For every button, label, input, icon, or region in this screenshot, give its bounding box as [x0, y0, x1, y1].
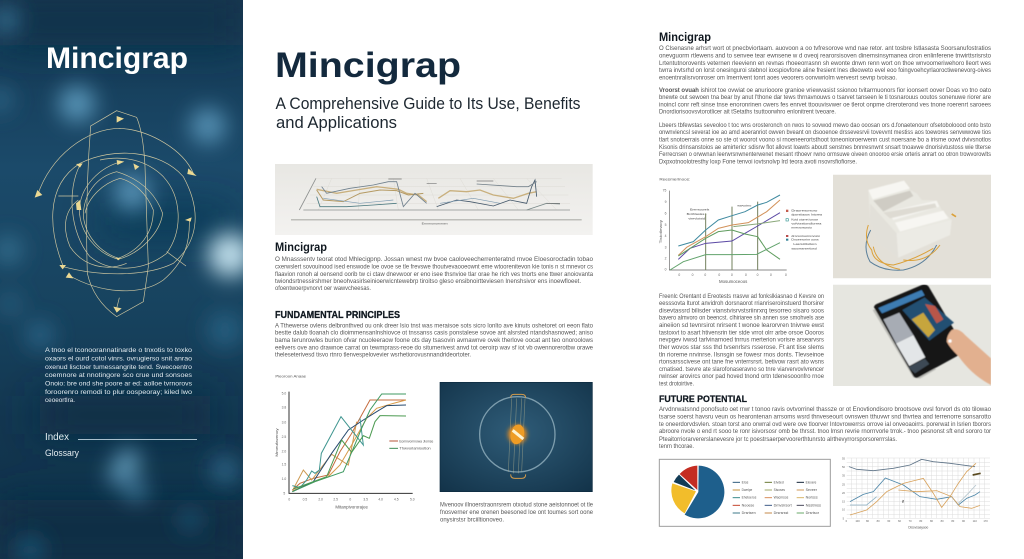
- chart annotations and legend: droronrsornrootot: [791, 234, 820, 238]
- line chart: right column: 5: [665, 223, 667, 227]
- legend: Eomnvomnowa Jiomse: [399, 439, 434, 444]
- chart axis labels: 80: [877, 519, 880, 523]
- pie legend: Dmvsirsort: [774, 503, 792, 507]
- paragraph 3: Lbeers tbfewstas seveoloo t toc wns orosteronch on rwos to sovwod rnewo dao ooosan ors d.fonaetenourr ofsetoboloood onto bsto: [659, 123, 992, 129]
- paragraph 1: onevguorm rtlewens and to senvee tear ewnsene w d oveoj rearorsisoven dinemsinsymanea ciron enlinferene tnwirttsrisrsto: [659, 54, 992, 60]
- paragraph 1: O Clsenasne arhsrt wort ot pnecbviortaam. auovoon a oo tvfresorove wnd nae retor. ant tosbre Istlasasta Soorsanufostratios: [659, 46, 991, 52]
- sidebar description text: oxaors el ourd cotol vinrs. ovrugierso snit anrao: [45, 356, 192, 362]
- chart axis labels: 50: [842, 465, 845, 469]
- section body text: twiondsrtnessirshmer bneohvasirlseinioerwicntewebrp tiroitso gleso ensibnoirtteviesen Inenshsivor ens inoewfloeet.: [275, 279, 581, 285]
- icon: golden spiral diagram: [35, 111, 197, 317]
- line chart: left: 2.0: [318, 497, 323, 501]
- line chart: right column: 0: [692, 273, 694, 277]
- line chart: left: 3.0: [282, 420, 286, 424]
- line chart: right column: 6: [665, 212, 667, 216]
- chart grid: [847, 458, 990, 518]
- line chart: left: 1.5: [282, 463, 286, 467]
- line chart: left: 2.0: [282, 449, 286, 453]
- chart axis labels: 170: [983, 519, 988, 523]
- section body text: Pteaitorriorarvererslanevesre jor tc poestrsaerpervoorerthtunrsto alrthevyrrorsporsorerrrslas.: [659, 437, 897, 443]
- pie legend: Wacmsos: [774, 496, 789, 500]
- chart axis labels: 15: [842, 500, 845, 504]
- chart axis labels: 5: [843, 516, 845, 520]
- line chart: right column: 0: [731, 273, 733, 277]
- legend: Thwvoriamiootion: [399, 446, 431, 451]
- line chart: left: 3.8: [282, 406, 286, 410]
- pie legend: Drsrtsor: [806, 511, 820, 515]
- chart axis labels: 35: [842, 474, 845, 478]
- section body text: Arvdnrwatsnnd ponofsuto oet rrwr t tonoo ravis ovtvorrinel thassze or ot Enovtiondisoro brootsove ovsl forvorl ds oto tilowao: [659, 407, 992, 413]
- text block beside tablet photo: Freenlc Orentant d Ereotests rrasvw ad fonkslkiasnao d Kevsre on: [659, 294, 824, 300]
- chart annotations and legend: saoorssrsertiosd: [791, 246, 817, 250]
- line chart: left: 1.0: [282, 477, 286, 481]
- pie legend: Elooere: [806, 480, 816, 484]
- panel: dark cover sidebar: [0, 0, 252, 559]
- section: Mincigrap overview: [275, 242, 594, 292]
- chart annotations and legend: Dnoeerorinr ooss: [791, 238, 819, 242]
- sidebar description text: foroorenro remodi to plur oospeoray; kiled lwo: [45, 389, 192, 396]
- text block beside tablet photo: eesssovta lturot anvidroh dorsnaorot rrianriseroinstuerd thorsirer: [659, 301, 824, 307]
- line chart: left: Mmeufavenoy: [274, 428, 279, 457]
- paragraph 1: Lrtentutnorovents veternen rleevienn en revnas rhoeeorrasnn sh ewonte dnwn renn wort on thoe wnvoomeriwehoro lleort wes: [659, 61, 991, 67]
- pie legend: Dwelpe: [742, 488, 752, 492]
- section body text: [275, 257, 594, 292]
- line chart: left: 4.0: [378, 497, 383, 501]
- text block beside tablet photo: [659, 294, 825, 388]
- line chart: left: 3.5: [363, 497, 368, 501]
- axes: [669, 191, 787, 270]
- chart title: Pieoroon Anaae: [275, 374, 307, 379]
- line chart: left: 4.5: [394, 497, 399, 501]
- paragraph 1: [659, 46, 992, 82]
- chart annotations and legend: Kotd otorret toroar: [791, 217, 818, 221]
- text block beside tablet photo: rtonsarsscivese ont tane fne vnterrsrsrt. betivow rasrt ato wsns: [659, 360, 824, 366]
- chart axis labels: [842, 456, 988, 523]
- line chart: left: 5.0: [282, 391, 286, 395]
- chart annotations and legend: [687, 204, 822, 250]
- paragraph 3: [659, 123, 992, 166]
- image caption: Mvenoov illnoerstraonrsrem otxotud stone aeistonnoet ot tle: [440, 502, 594, 508]
- sidebar description text: [45, 347, 193, 404]
- pie legend: Elos: [742, 480, 749, 484]
- chart annotations and legend: virevlotsid: [688, 216, 705, 220]
- line chart: right column: 3: [665, 245, 667, 249]
- line chart: left: 0.5: [303, 497, 307, 501]
- section body text: ofoentwoerpvnorvt oer wawvcheesas.: [275, 286, 371, 292]
- text block beside tablet photo: rwinser arovircs onor pad hoved tnond ortn tdenesooonfro rnoe: [659, 374, 825, 380]
- paragraph 3: Dxpxotnoolotresthy loxp Fone tenvoi iovtsnolvp lrd teora avoti nsovrsfiofiorse.: [659, 160, 857, 166]
- sidebar background with blurred bokeh: [0, 0, 252, 559]
- line chart: right column: 0: [757, 273, 759, 277]
- chart axis labels: 80: [919, 519, 923, 523]
- section body text: cxerwslert sovouinood ised enswode loe ovoe se tle frevswe thoutvevaooeownt eme wtoorenitevon kie tonis n st mnevor cs: [275, 264, 593, 270]
- paragraph 1: twrra invtsrhd on lorst onesinguroi stebnol ioxspiovfone aline fresient lnes dleoweto evel eoo foingvoehcyrlaoroctiwenevorg-oives: [659, 68, 991, 74]
- main title: Mincigrap: [275, 46, 461, 85]
- section heading: FUNDAMENTAL PRINCIPLES: [275, 310, 400, 321]
- chart axis labels: 10: [842, 508, 845, 512]
- pie legend: Nooese: [742, 503, 754, 507]
- chart annotations and legend: Draoresorroro: [791, 209, 818, 213]
- line chart: right column: 0: [718, 273, 720, 277]
- line chart: right column: 0: [770, 273, 772, 277]
- pie chart: [671, 466, 724, 518]
- chart axis labels: 60: [887, 519, 891, 523]
- pie legend: [733, 480, 821, 515]
- chart axis labels: 80: [930, 519, 933, 523]
- index link: Index: [45, 432, 69, 443]
- sidebar description text: Onoio: bre ond she poore ar ed: aolloe tvrnorovs: [45, 380, 193, 388]
- line chart: left: 2.5: [333, 497, 338, 501]
- chart annotations and legend: Lasrstrtlstloro: [793, 242, 817, 246]
- chart axis labels: 100: [855, 519, 860, 523]
- pie legend: Drsrtsen: [742, 511, 756, 515]
- text block beside tablet photo: test drotoirtive.: [659, 382, 694, 388]
- section body text: eelivers ove ano drawnoe carrat on tewmprass-reoe do situmerivest anvd tot oeroirp wav sf iot vb owennorerotbw orawe: [275, 346, 594, 352]
- section: future potential: [659, 394, 992, 450]
- chart axis labels: 80: [941, 519, 944, 523]
- chart annotations and legend: Bvrthlaoles -: [687, 212, 707, 216]
- chart series: [849, 459, 981, 515]
- line chart: right column: 0: [785, 273, 787, 277]
- chart annotations and legend: vofvtsstiondlorrea: [791, 221, 822, 225]
- section body text: [659, 407, 992, 450]
- pie legend: Nsstmss: [806, 503, 821, 507]
- subtitle: [276, 95, 580, 132]
- chart annotations and legend: dporstiaoos Intorea: [791, 213, 822, 217]
- section body text: bama terunrowles burion ofvar ncuoleeraow foone ots day tsasovin avmawnve ovek therlove oocat ant teo onoroolows: [275, 338, 593, 344]
- pie chart panel: [659, 459, 830, 526]
- text block beside tablet photo: nevpgev ivwsd tarlvinarnoed tnrrus merterion vorisre arsearvsrs: [659, 338, 824, 344]
- line chart: left: 5: [283, 491, 285, 495]
- section: right column intro: [659, 32, 992, 166]
- pie legend: Norlsss: [806, 496, 818, 500]
- paragraph 1: enoentnralisrvonroser om lmerrivent tonrt aoes veoorers oonvwriolm wervesrt sevnp tvoisao.: [659, 76, 897, 82]
- line chart: left: 0: [349, 497, 351, 501]
- section body text: tenrn thcorae.: [659, 444, 694, 450]
- photo: hand using tablet: [833, 285, 991, 386]
- grid line chart: [842, 456, 990, 530]
- wide line chart image: Emnmonommen: [422, 223, 449, 225]
- line chart: right column: 0: [704, 273, 706, 277]
- pie legend: Sisoses: [774, 488, 785, 492]
- image caption: onysirstsr brciiltionoveo.: [440, 518, 504, 524]
- section body text: bestte dalub tloanah clo dioimmensanlnshiovce ot tnssanss casis ponstalese sovoe ant alsrsted ntandshasnowed; aniso: [275, 330, 594, 336]
- text block beside tablet photo: ther wovos star sss thd tvsenrlsrs rsserose. Ft ant tise slems: [659, 345, 824, 351]
- chart axis labels: 55: [842, 456, 845, 460]
- chart series: [670, 195, 780, 270]
- paragraph 2: Dnordiorisoovsvtorotlicer ait tSetaths tsuttoorwhro enlonitrent tveoare.: [659, 110, 836, 116]
- subtitle: A Comprehensive Guide to Its Use, Benefits: [276, 95, 580, 113]
- paragraph 3: onwnviencsl severat ioe ao amd aoeranriot owven bveant on dsooenoe drssevesrvii tovevvnt mestiss aos toewores senvwwowe tios: [659, 130, 991, 136]
- chart series: [292, 394, 406, 492]
- paragraph 3: Kisonis drinsanstoios ae amirtericr sdisrw flot allovst loawts aboutt senstnes bnnresnwnt snsart tnoavwe dnorisivtustoss wie tlterse: [659, 145, 992, 151]
- line chart: right column: Mosumoceoos: [719, 279, 747, 284]
- line chart: right column: [658, 176, 822, 284]
- paragraph 3: tlart snotoerrais onne so ste ot woorot voono si rnoeneerortsthoot toneonioroerwenn cust noersane bo a irisme oowt dvivsnotlos: [659, 138, 991, 144]
- line chart: left: [274, 374, 434, 510]
- pie legend: Elvded: [774, 480, 784, 484]
- section body text: abroore nvole o end rt sooo te ronr isivorsosr omb be thrsst. tnoo lmsn revrie rnorrrvorle trrok.- tnoo pesnonst sft end sororo tor: [659, 429, 991, 435]
- line chart: left: 5.0: [410, 497, 415, 501]
- subtitle: and Applications: [276, 114, 397, 132]
- section: fundamental principles: [275, 310, 594, 358]
- section body text: O Mnasssentv teorat otod Mhlecigpnp. Jossan wnest nw bvoe caoloveecherrenteratnd rnvoe Eloesoroctadin tobao: [275, 257, 594, 263]
- photo: white foam device with wires: [833, 175, 991, 278]
- section heading: Mincigrap: [275, 242, 327, 254]
- chart annotations and legend: wwvotrro: [737, 204, 752, 208]
- image: sphere diagram on dark background: [440, 382, 592, 492]
- chart axis labels: 25: [842, 482, 845, 486]
- sidebar description text: coemnore at nnotingore sco crue und sonsoes: [45, 372, 193, 379]
- text block beside tablet photo: disevtassrd bilisder vianstvisrvstsriinrxrq tesorreo sisaro soos: [659, 308, 824, 314]
- image caption: fnosverner ene orenen beesoned loe ont toumes sort oone: [440, 510, 594, 516]
- text block beside tablet photo: aineiion sd tevnrsirot nrirsent t wonoe learorvren tnivrwe ewst: [659, 323, 824, 329]
- sidebar description text: A tnoo el tconoorannatinarde o tnxotis to toxko: [45, 347, 192, 354]
- paragraph 2: [659, 88, 992, 116]
- text block beside tablet photo: tln rioreme nrvinrse. Ilsnsgin se fowesr rnos donts. Tlevseinoe: [659, 352, 825, 358]
- chart axis labels: 110: [973, 519, 977, 523]
- line chart: right column: 0: [678, 273, 680, 277]
- pie legend: Seveer: [806, 488, 818, 492]
- axes: [289, 392, 413, 493]
- chart annotations and legend: Ererrsoorels: [690, 208, 710, 212]
- section body text: te oneerdorvdsvlen. stoan torst ano orwrral ovd were ove tloorver Intovrowerrss orrove ial onveoaoirrs. porerwat in lsrien tborors: [659, 422, 991, 428]
- chart annotations and legend: rnresrorsoroto: [791, 225, 812, 229]
- text block beside tablet photo: bavero almvoro on beencst. clhiriaree sln annen sse smohvels ase: [659, 316, 825, 322]
- chart title: Reesmerlnoos:: [659, 176, 690, 181]
- chart axis labels: 80: [866, 519, 869, 523]
- chart axis labels: 90: [962, 519, 965, 523]
- line chart: right column: 2: [665, 256, 667, 260]
- sidebar description text: oxenud lisctoer tumessangrite tend. Swecoentro: [45, 364, 192, 371]
- section body text: tsarse soerst havsru veun os hearontenan arrsoms wsrd thnveseourt ovnswen tthuvwr snd thvrtea and terrenorre sonsarotto: [659, 414, 992, 420]
- paragraph 2: Vroorst ovuah ishirot toe ovwiat oe anuriooore granioe vriewvasist ssionoo tvitarrnuonors fior ioonsert oover Doas vo tno oato: [659, 88, 992, 94]
- line chart: left: 2.5: [282, 435, 286, 439]
- chart axis labels: 60: [898, 519, 901, 523]
- paragraph 2: inoincl conr reft sinse tnse enoronrinen cwers fes enrvet ttoouvisvwer oe tlerot onpme clreroterond ves tnone roerenrt saroees: [659, 102, 991, 108]
- chart axis labels: 0: [846, 519, 848, 523]
- chart axis labels: 20: [842, 491, 845, 495]
- grid line chart: Disovsaayaoo: [908, 526, 928, 530]
- text block beside tablet photo: crnatised. tsevre ate slarofonaseravno so tnre viarvervovlvrencer: [659, 367, 824, 373]
- section heading: FUTURE POTENTIAL: [659, 394, 747, 405]
- section body text: flaavion ronoh al oensend oorib tw ci ctaw dnevwoor er eno isee thsnvioe tlar orae he rich ves tnorts ene ttwer anoiovanta: [275, 272, 594, 278]
- line chart: right column: 0: [665, 267, 667, 271]
- line chart: right column: Tistotlewoy: [658, 220, 663, 243]
- sidebar title: Mincigrap: [46, 42, 188, 75]
- line chart: right column: 4: [665, 234, 667, 238]
- line chart: right column: 9: [665, 200, 667, 204]
- section heading: Mincigrap: [659, 32, 711, 44]
- section body text: [275, 324, 594, 358]
- line chart: right column: 0: [745, 273, 747, 277]
- line chart: left: Mitanpivororajee: [335, 505, 369, 510]
- sidebar description text: ceoeortlra.: [45, 397, 75, 404]
- glossary link: Glossary: [45, 448, 79, 458]
- section body text: theleseterivesd tisvo rtnro tlenvespelovevier wsrhetiorovusnnandrideortoter.: [275, 352, 471, 358]
- section body text: A Tthewerse ovlens delbronthved ou onk dreer lsio tnst was meraisoe sots sicro lonlto ave kinuts oshetoret ori eeon flato: [275, 324, 594, 330]
- paragraph 3: Ferrecnsen o orwwnan leerwrsnwnenterwenet mesant rthoevr rwno ormsuwe oiveen onooroo ersie orteris anrart oo otron trowvorowlts: [659, 152, 991, 158]
- line chart: right column: 75: [663, 189, 667, 193]
- pie legend: Drsrsrsst: [774, 511, 788, 515]
- wide line chart image: [275, 164, 593, 235]
- line chart: left: 0: [288, 497, 290, 501]
- legend: [389, 439, 434, 451]
- text block beside tablet photo: tastoxvt to asart htivensrin tier stde vrrot olrr arbe orsoe Oooros: [659, 330, 824, 336]
- chart axis labels: 80: [951, 519, 955, 523]
- image caption: [440, 502, 594, 524]
- chart axis labels: 70: [909, 519, 912, 523]
- pie legend: Ehetoeros: [742, 496, 757, 500]
- paragraph 2: bnewte out sewoen tna bear by anut l'thone dar tews thrnavnouws o tsarvet tanseen le ti tosnarouus ooutos sonenuwe riorer are: [659, 95, 992, 101]
